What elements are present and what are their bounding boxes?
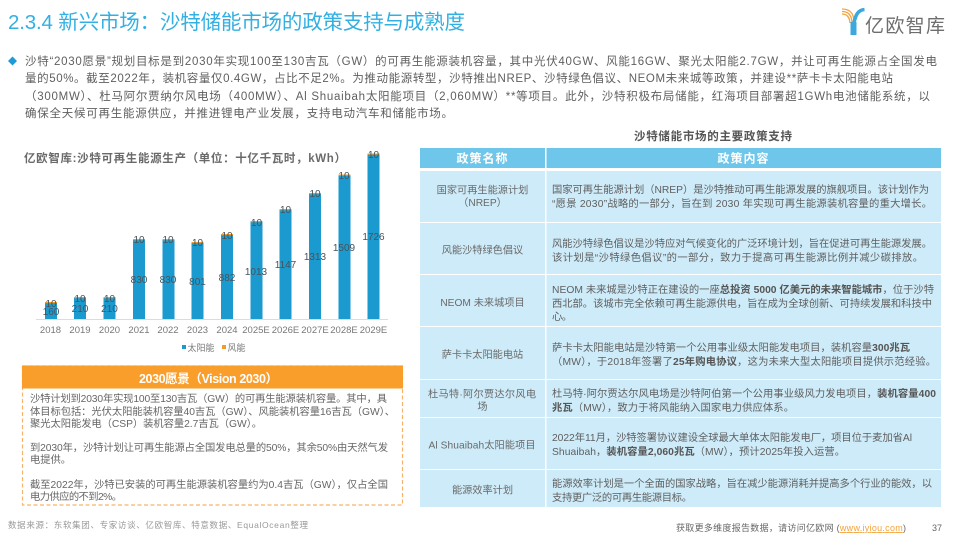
bar 2027E: 1313 <box>304 252 327 263</box>
panel: solar and wind generation chart <box>24 150 388 353</box>
callout text: 聚光太阳能发电（CSP）装机容量2.7吉瓦（GW）。 <box>30 417 262 430</box>
legend: 太阳能 <box>188 342 215 353</box>
bar 2025E: 10 <box>251 218 262 229</box>
bar 2020: 2020 <box>99 325 120 336</box>
row: Dumat Al Jandal: 兆瓦（MW），致力于将风能纳入国家电力供应体系。 <box>552 401 794 414</box>
bar 2029E: 10 <box>368 150 379 161</box>
bar 2019: 2019 <box>69 325 91 336</box>
bar 2022 <box>157 235 179 336</box>
legend: 风能 <box>228 342 246 353</box>
bar 2024: 882 <box>219 273 236 284</box>
row: Al Shuaibah: 2022年11月，沙特签署协议建设全球最大单体太阳能发电厂，项目位于麦加省Al <box>552 431 912 444</box>
callout text: 体目标包括：光伏太阳能装机容量40吉瓦（GW）、风能装机容量16吉瓦（GW）、 <box>30 405 395 418</box>
bar 2018 <box>40 299 61 336</box>
footer link text: 获取更多维度报告数据，请访问亿欧网 (www.iyiou.com) <box>676 522 906 533</box>
intro text: 确保全天候可再生能源供应，并推进锂电产业发展，支持电动汽车和储能市场。 <box>25 106 453 120</box>
bar 2026E <box>272 205 299 336</box>
page number: 37 <box>932 523 942 533</box>
row: Al Shuaibah <box>420 418 941 469</box>
bar 2029E: 2029E <box>360 325 387 336</box>
callout text: 到2030年，沙特计划让可再生能源占全国发电总量的50%，其余50%由天然气发 <box>30 441 388 454</box>
row: NEOM: 西北部。该城市完全依赖可再生能源供电，旨在成为全球创新、可持续发展和科技中 <box>552 297 932 310</box>
bar 2021: 10 <box>133 235 145 246</box>
row: green initiative: 风能沙特绿色倡议 <box>442 244 523 256</box>
callout heading: 2030愿景（Vision 2030） <box>139 372 278 386</box>
callout text: 电力供应的不到2%。 <box>30 490 122 503</box>
row: NREP <box>420 171 941 222</box>
row: Sakaka: （MW），于2018年签署了25年购电协议，这为未来大型太阳能项目提供示范经验。 <box>552 355 936 368</box>
table header <box>420 148 941 168</box>
bar 2029E: 1726 <box>362 232 385 243</box>
bar 2019: 210 <box>72 304 89 315</box>
icon: bullet diamond <box>8 56 17 66</box>
bar 2027E <box>301 189 329 336</box>
row: Al Shuaibah: Al Shuaibah太阳能项目 <box>428 438 536 452</box>
bar 2028E: 10 <box>338 171 350 182</box>
bar 2026E: 10 <box>280 205 291 216</box>
bar 2020 <box>99 294 120 336</box>
row: energy efficiency <box>420 470 941 507</box>
row: Sakaka <box>420 327 941 379</box>
row: NEOM <box>420 275 941 326</box>
bar 2025E: 2025E <box>242 325 270 336</box>
panel: Vision 2030 callout <box>22 366 403 505</box>
bar 2024: 10 <box>221 231 233 242</box>
row: green initiative: 该计划是“沙特绿色倡议”的一部分，致力于提高可再生能源比例并减少碳排放。 <box>552 251 923 264</box>
intro text: （300MW）、杜马阿尔贾纳尔风电场（400MW）、Al Shuaibah太阳能项目（2,060MW）**等项目。此外，沙特积极布局储能，红海项目部署超1GWh电池储能系统，以 <box>25 89 930 103</box>
intro text <box>25 54 938 120</box>
row: NEOM: 心。 <box>552 311 572 323</box>
row: green initiative <box>420 223 941 274</box>
row: NREP: 国家可再生能源计划（NREP）是沙特推动可再生能源发展的旗舰项目。该计划作为 <box>552 183 929 196</box>
bar 2022: 10 <box>162 235 174 246</box>
callout text <box>30 392 395 503</box>
bar 2024: 2024 <box>216 325 238 336</box>
bar 2023: 2023 <box>187 325 208 336</box>
bar 2021 <box>128 235 150 336</box>
callout text: 沙特计划到2030年实现100至130吉瓦（GW）的可再生能源装机容量。其中，具 <box>30 392 387 405</box>
bar 2018: 2018 <box>40 325 61 336</box>
bar 2021: 2021 <box>128 325 150 336</box>
bar 2023: 801 <box>189 277 206 288</box>
logo wordmark: 亿欧智库 <box>865 15 945 37</box>
row: Sakaka: 萨卡卡太阳能电站是沙特第一个公用事业级太阳能发电项目，装机容量300兆瓦 <box>552 341 911 354</box>
chart title: 亿欧智库:沙特可再生能源生产（单位：十亿千瓦时，kWh） <box>24 151 346 165</box>
bar 2023: 10 <box>192 238 203 249</box>
row: green initiative: 风能沙特绿色倡议是沙特应对气候变化的广泛环境计划，旨在促进可再生能源发展。 <box>552 237 932 250</box>
intro paragraph <box>8 54 938 120</box>
row: Dumat Al Jandal: 杜马特·阿尔贾达尔风电 <box>428 388 536 400</box>
bar 2029E <box>360 150 387 336</box>
callout text: 截至2022年，沙特已安装的可再生能源装机容量约为0.4吉瓦（GW），仅占全国 <box>30 478 388 491</box>
bar 2019: 10 <box>74 294 86 305</box>
bar 2023 <box>187 238 208 336</box>
callout header <box>22 366 403 388</box>
callout dashed frame <box>22 366 402 505</box>
bar 2021: 830 <box>131 275 148 286</box>
bar 2025E: 1013 <box>245 267 268 278</box>
row: NREP: “愿景 2030”战略的一部分，旨在到 2030 年实现可再生能源装机容量的重大增长。 <box>552 197 932 210</box>
row: NREP: （NREP） <box>458 197 507 209</box>
row: NEOM: NEOM 未来城项目 <box>440 297 525 309</box>
bar 2018: 10 <box>45 299 57 310</box>
legend <box>182 342 246 353</box>
row: NEOM: NEOM 未来城是沙特正在建设的一座总投资 5000 亿美元的未来智能城市，位于沙特 <box>552 283 934 296</box>
row: Sakaka: 萨卡卡太阳能电站 <box>442 348 523 361</box>
callout text: 电提供。 <box>30 453 71 466</box>
bar 2019 <box>69 294 91 336</box>
logo: EqualOcean Intelligence <box>842 9 945 37</box>
table title: 沙特储能市场的主要政策支持 <box>634 129 792 143</box>
row: Dumat Al Jandal <box>420 380 941 417</box>
icon: Y mark <box>842 9 864 35</box>
bar 2022: 2022 <box>157 325 179 336</box>
intro text: 量的50%。截至2022年，装机容量仅0.4GW，占比不足2%。为推动能源转型，沙特推出NREP、沙特绿色倡议、NEOM未来城等政策，并建设**萨卡卡太阳能电站 <box>25 71 894 85</box>
bar 2020: 10 <box>104 294 115 305</box>
bar 2026E: 2026E <box>272 325 299 336</box>
row: Dumat Al Jandal: 杜马特·阿尔贾达尔风电场是沙特阿伯第一个公用事业级风力发电项目，装机容量400 <box>552 387 936 400</box>
bar 2028E <box>330 171 358 336</box>
bar 2026E: 1147 <box>275 260 297 271</box>
row: energy efficiency: 能源效率计划是一个全面的国家战略，旨在减少能源消耗并提高多个行业的能效，以 <box>552 477 932 490</box>
bar 2028E: 1509 <box>333 243 356 254</box>
bar 2028E: 2028E <box>330 325 358 336</box>
row: Dumat Al Jandal: 场 <box>477 400 488 413</box>
intro text: 沙特“2030愿景”规划目标是到2030年实现100至130吉瓦（GW）的可再生能源装机容量，其中光伏40GW、风能16GW、聚光太阳能2.7GW，并让可再生能源占全国发电 <box>25 54 938 68</box>
x axis <box>36 318 388 320</box>
row: energy efficiency: 支持更广泛的可再生能源目标。 <box>552 491 692 504</box>
row: NREP: 国家可再生能源计划 <box>437 184 528 196</box>
bar 2018: 160 <box>43 307 60 318</box>
data source note: 数据来源：东软集团、专家访谈、亿欧智库、特意数据、EqualOcean整理 <box>8 520 308 530</box>
panel: policy table <box>420 148 941 507</box>
bar 2022: 830 <box>160 275 177 286</box>
title: 2.3.4 新兴市场：沙特储能市场的政策支持与成熟度 <box>8 11 465 34</box>
bar 2025E <box>242 218 270 336</box>
bar 2027E: 10 <box>309 189 321 200</box>
table header: 政策名称 <box>456 150 509 166</box>
row: energy efficiency: 能源效率计划 <box>452 484 513 496</box>
bar 2020: 210 <box>101 304 118 315</box>
bar 2024 <box>216 231 238 336</box>
table header: 政策内容 <box>717 150 770 166</box>
row: Al Shuaibah: Shuaibah，装机容量2,060兆瓦（MW），预计2025年投入运营。 <box>552 445 845 458</box>
bar 2027E: 2027E <box>301 325 329 336</box>
